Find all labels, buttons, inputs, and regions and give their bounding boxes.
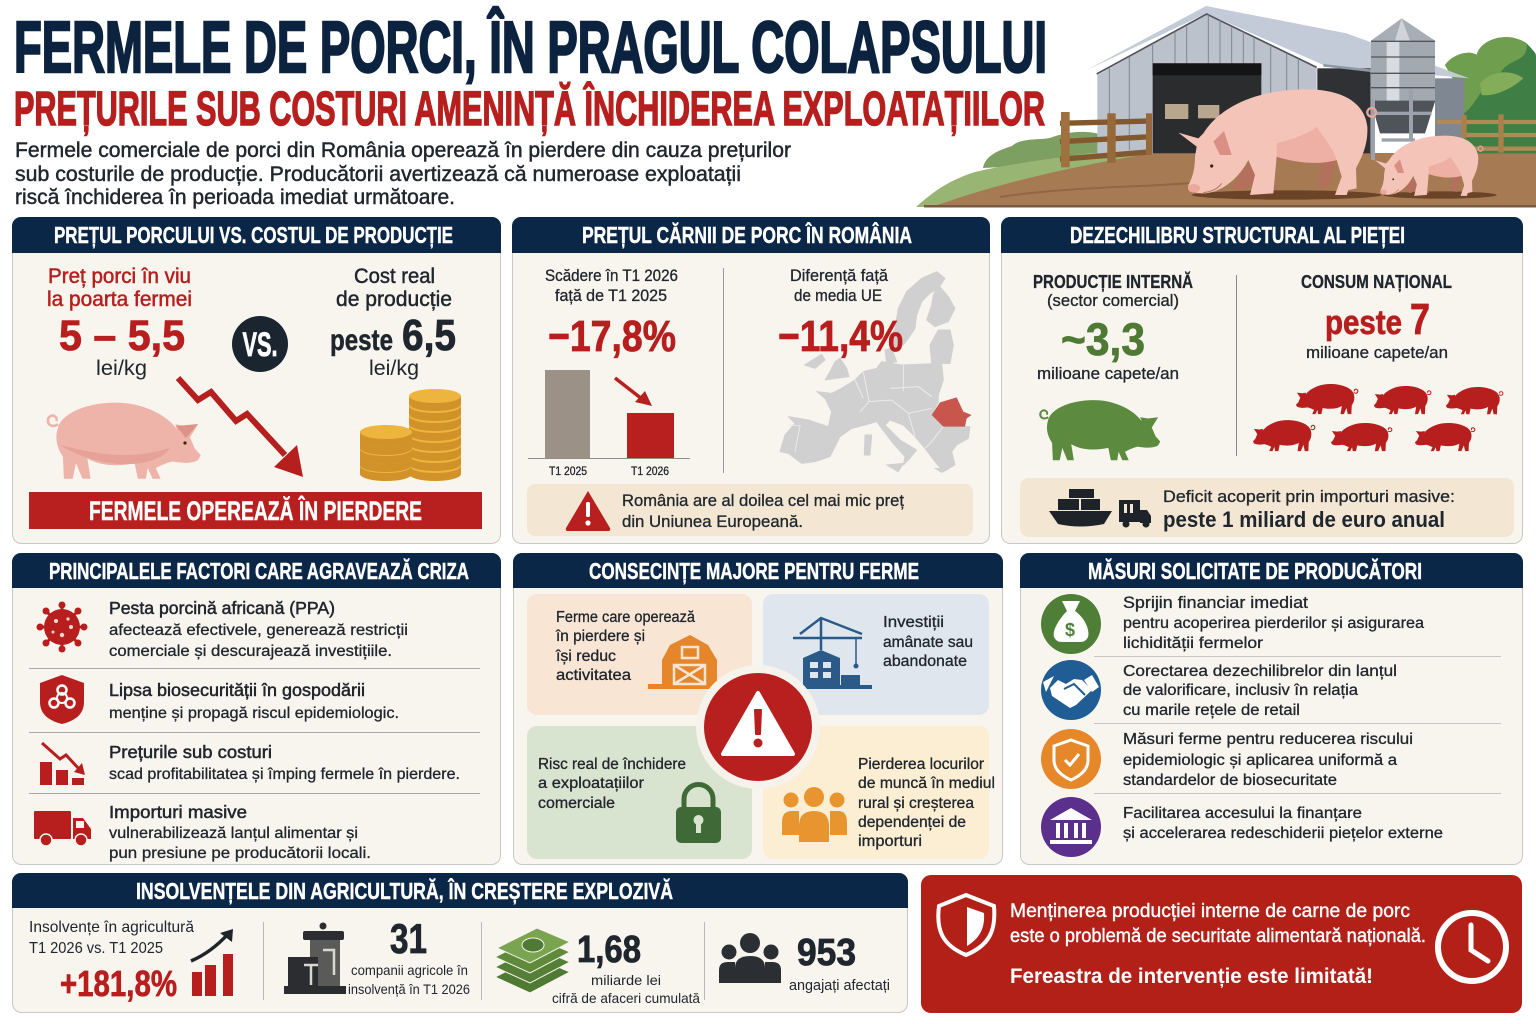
card: closure risk: a exploatațiilor (538, 775, 644, 792)
icon: shield check (1041, 729, 1101, 789)
card: closure risk (527, 726, 752, 859)
card: investments postponed: Investiții (883, 614, 944, 631)
stat: 31 companies: companii agricole în (351, 962, 468, 978)
measure 3 text (1123, 731, 1413, 789)
panel: major consequences (513, 553, 1003, 864)
stat: employees: 953 (797, 932, 856, 974)
factor 1 text: Pesta porcină africană (PPA) (109, 598, 335, 618)
factor 3 text: Prețurile sub costuri (109, 742, 272, 762)
map of Europe (780, 272, 972, 472)
icon: ship and truck (1049, 489, 1151, 528)
national consumption stat: 7 (1410, 295, 1430, 344)
production cost: lei/kg (369, 357, 419, 380)
farm gate price: lei/kg (96, 357, 147, 380)
hero illustration: farm with pigs (916, 6, 1536, 208)
bar chart: T1 2026 (631, 466, 669, 478)
measure 2 text: Corectarea dezechilibrelor din lanțul (1123, 663, 1397, 680)
icon: insolvent company (284, 922, 346, 994)
measure 2 text (1123, 663, 1397, 719)
card: operating at a loss: activitatea (556, 667, 631, 684)
panel header: DEZECHILIBRU STRUCTURAL AL PIEȚEI (1070, 222, 1405, 248)
panel header: MĂSURI SOLICITATE DE PRODUCĂTORI (1088, 557, 1422, 584)
national consumption stat: milioane capete/an (1306, 344, 1448, 362)
intro paragraph: sub costurile de producție. Producătorii avertizează că numeroase exploatații (15, 163, 741, 186)
panel: pork meat price in Romania (512, 217, 990, 544)
stat: turnover: miliarde lei (591, 972, 661, 988)
card: job losses: de muncă în mediul (858, 775, 995, 792)
measure 3 text: standardelor de biosecuritate (1123, 772, 1337, 789)
factor 2 text (109, 680, 399, 722)
factor 3 text (109, 742, 460, 783)
icon: red truck (34, 811, 91, 846)
message text: Fereastra de intervenție este limitată! (1010, 965, 1373, 988)
bar chart (528, 370, 690, 478)
panel header: INSOLVENȚELE DIN AGRICULTURĂ, ÎN CREȘTERE EXPLOZIVĂ (136, 877, 673, 905)
icon: falling bars (40, 743, 85, 785)
factor 3 text: scad profitabilitatea și împing fermele în pierdere. (109, 766, 460, 783)
card: job losses: rural și creșterea (858, 795, 974, 812)
card: investments postponed: abandonate (883, 653, 967, 670)
national consumption stat: CONSUM NAȚIONAL (1301, 272, 1452, 292)
stat: difference vs EU (778, 266, 903, 361)
measure 1 text: Sprijin financiar imediat (1123, 594, 1308, 612)
icon: banknotes (495, 928, 570, 993)
stat: 31 companies: 31 (390, 915, 427, 962)
farm gate price (47, 265, 192, 380)
stat: insolvency growth: Insolvențe în agricultură (29, 919, 194, 936)
icon: red pigs (1253, 384, 1503, 451)
domestic production stat (1033, 271, 1193, 383)
icon: people (782, 787, 847, 842)
icon: biohazard shield (40, 675, 84, 724)
icon: central warning badge (696, 665, 820, 789)
stat: drop T1 2026: față de T1 2025 (555, 286, 667, 305)
stat: insolvency growth: +181,8% (60, 963, 177, 1004)
production cost: 6,5 (402, 311, 456, 360)
loss banner (29, 492, 482, 529)
domestic production stat: (sector comercial) (1047, 292, 1179, 310)
measure 1 text: pentru acoperirea pierderilor și asigurarea (1123, 615, 1424, 632)
domestic production stat: milioane capete/an (1037, 365, 1179, 383)
card: job losses (763, 726, 995, 859)
stat: insolvency growth (29, 919, 233, 1004)
measure 3 text: epidemiologic și aplicarea uniformă a (1123, 752, 1397, 769)
stat: insolvency growth: T1 2026 vs. T1 2025 (29, 940, 163, 957)
bar chart: T1 2025 (549, 466, 587, 478)
import deficit callout: Deficit acoperit prin importuri masive: (1163, 487, 1455, 506)
panel: pork price vs production cost (12, 217, 501, 544)
intro paragraph: riscă închiderea în perioada imediat următoare. (15, 186, 455, 209)
stat: difference vs EU: −11,4% (778, 312, 903, 361)
measure 4 text (1123, 805, 1443, 842)
card: operating at a loss (527, 594, 752, 715)
production cost (330, 265, 456, 380)
stat: drop T1 2026 (545, 266, 678, 361)
production cost: de producție (336, 288, 452, 311)
icon: employees (719, 933, 781, 983)
measure 3 text: Măsuri ferme pentru reducerea riscului (1123, 731, 1413, 748)
icon: green pig (1040, 400, 1160, 460)
panel header: PREȚUL CĂRNII DE PORC ÎN ROMÂNIA (582, 221, 912, 248)
icon: money bag (1041, 594, 1101, 654)
panel header (1001, 217, 1523, 253)
card: job losses: Pierderea locurilor (858, 756, 984, 773)
national consumption stat: peste (1325, 304, 1402, 342)
import deficit callout (1020, 478, 1514, 537)
stat: difference vs EU: de media UE (794, 286, 882, 305)
factor 4 text (109, 802, 371, 862)
stat: employees: angajați afectați (789, 977, 890, 994)
panel header: CONSECINȚE MAJORE PENTRU FERME (589, 558, 919, 584)
factor 2 text: Lipsa biosecurității în gospodării (109, 680, 365, 700)
panel: aggravating factors (12, 553, 501, 864)
VS badge: VS. (242, 326, 278, 364)
measure 4 text: și accelerarea redeschiderii piețelor externe (1123, 825, 1443, 842)
import deficit callout: peste 1 miliard de euro anual (1163, 507, 1445, 532)
production cost: Cost real (354, 265, 435, 288)
measure 2 text: de valorificare, inclusiv în relația (1123, 682, 1358, 699)
loss banner: FERMELE OPEREAZĂ ÎN PIERDERE (89, 495, 422, 526)
icon: virus (37, 602, 87, 652)
factor 1 text: afectează efectivele, generează restricții (109, 622, 408, 639)
panel: food security call to action (921, 875, 1522, 1013)
message text: Menținerea producției interne de carne de porc (1010, 901, 1410, 922)
arrow: falling price (178, 378, 303, 477)
message text (1010, 901, 1426, 988)
intro paragraph: Fermele comerciale de porci din România operează în pierdere din cauza prețurilor (15, 139, 791, 162)
stat: drop T1 2026: Scădere în T1 2026 (545, 266, 678, 285)
farm gate price: Preț porci în viu (48, 265, 191, 288)
farm gate price: la poarta fermei (47, 288, 192, 311)
stat: employees (789, 932, 890, 994)
factor 1 text (109, 598, 408, 660)
icon: clock (1438, 913, 1506, 981)
panel: measures requested (1020, 553, 1523, 864)
stat: drop T1 2026: −17,8% (548, 312, 676, 361)
card: operating at a loss: își reduc (555, 648, 616, 665)
panel header (1020, 553, 1523, 588)
card: closure risk: Risc real de închidere (538, 756, 686, 773)
panel header: PREȚUL PORCULUI VS. COSTUL DE PRODUCȚIE (54, 222, 453, 248)
factor 2 text: menține și propagă riscul epidemiologic. (109, 705, 399, 722)
icon: shield (938, 895, 994, 955)
message text: este o problemă de securitate alimentară națională. (1010, 926, 1426, 947)
card: investments postponed (763, 594, 989, 715)
panel header (512, 217, 990, 253)
measure 1 text (1123, 594, 1424, 652)
measure 1 text: lichidității fermelor (1123, 635, 1263, 652)
icon: pink pig (48, 403, 201, 479)
stat: turnover: cifră de afaceri cumulată (552, 990, 700, 1006)
VS badge (232, 316, 288, 372)
callout: second lowest price (527, 484, 973, 536)
panel header (12, 217, 501, 253)
panel header (513, 553, 1003, 588)
icon: crane and building (793, 618, 872, 689)
icon: bank (1041, 797, 1101, 857)
card: operating at a loss: în pierdere și (555, 628, 645, 645)
factor 4 text: vulnerabilizează lanțul alimentar și (109, 825, 358, 842)
panel header: PRINCIPALELE FACTORI CARE AGRAVEAZĂ CRIZA (49, 557, 469, 584)
card: investments postponed: amânate sau (883, 634, 973, 651)
stat: 31 companies (348, 915, 470, 997)
domestic production stat: PRODUCȚIE INTERNĂ (1033, 271, 1193, 292)
card: job losses: importuri (858, 833, 922, 850)
farm gate price: 5 – 5,5 (59, 312, 185, 360)
callout: second lowest price: din Uniunea Europeană. (622, 512, 803, 531)
icon: barn (648, 635, 718, 689)
card: closure risk: comerciale (538, 795, 615, 812)
production cost: peste (330, 324, 393, 357)
stat: turnover (552, 929, 700, 1006)
panel header (12, 873, 908, 908)
stat: turnover: 1,68 (577, 929, 641, 971)
stat: difference vs EU: Diferență față (790, 266, 889, 285)
factor 4 text: Importuri masive (109, 802, 247, 822)
panel header (12, 553, 501, 588)
domestic production stat: ~3,3 (1061, 314, 1145, 365)
callout: second lowest price: România are al doilea cel mai mic preț (622, 491, 904, 510)
panel: agricultural insolvencies (12, 873, 908, 1012)
icon: coin stacks (360, 389, 461, 481)
intro paragraph (15, 139, 791, 209)
icon: padlock (676, 784, 721, 843)
icon: money bag: $ (1065, 620, 1075, 640)
measure 4 text: Facilitarea accesului la finanțare (1123, 805, 1362, 822)
national consumption stat (1301, 272, 1452, 362)
icon: handshake (1041, 660, 1101, 720)
panel: structural market imbalance (1001, 217, 1523, 544)
factor 1 text: comerciale și descurajează investițiile. (109, 643, 392, 660)
factor 4 text: pun presiune pe producătorii locali. (109, 845, 371, 862)
card: job losses: dependenței de (858, 814, 966, 831)
stat: 31 companies: insolvență în T1 2026 (348, 981, 470, 997)
card: operating at a loss: Ferme care operează (556, 609, 695, 626)
measure 2 text: cu marile rețele de retail (1123, 702, 1300, 719)
